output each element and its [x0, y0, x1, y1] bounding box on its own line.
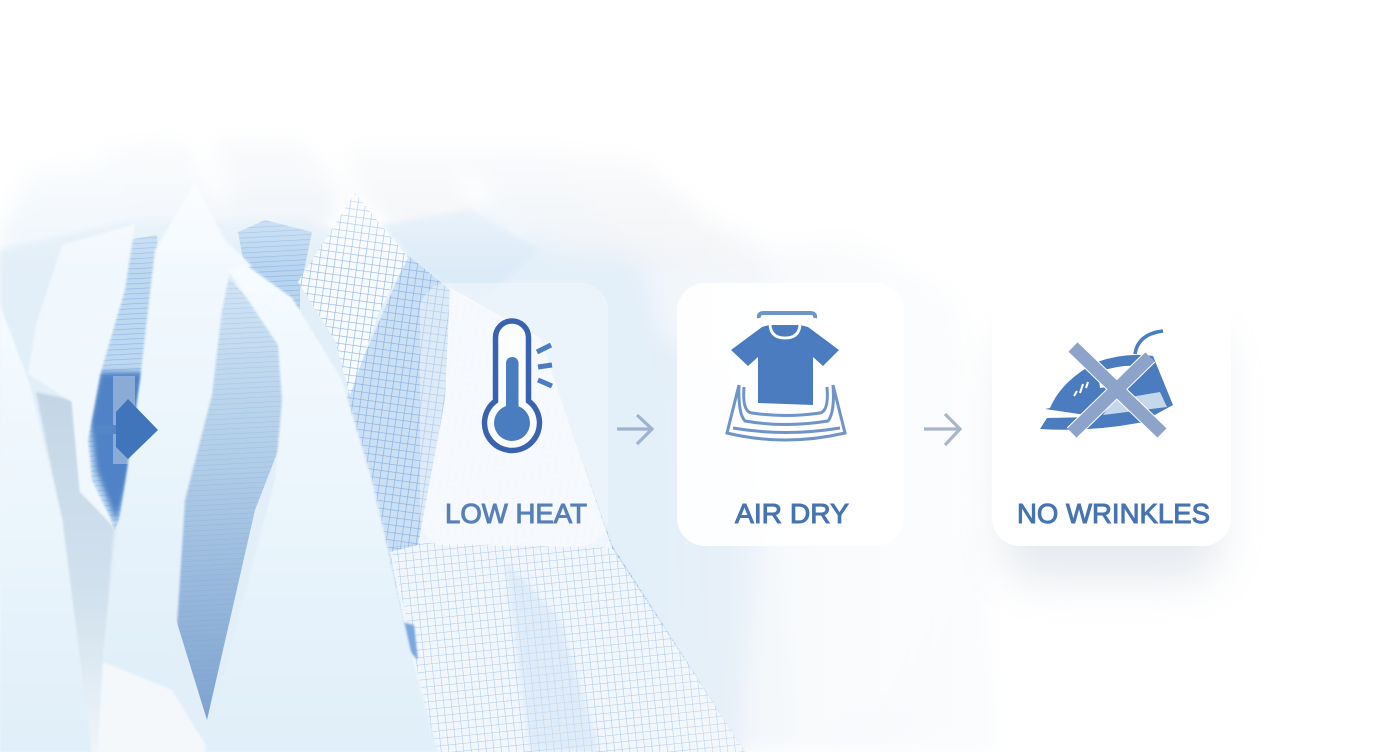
label: air dry: AIR DRY	[735, 498, 849, 529]
card shadow	[1002, 330, 1220, 580]
large front white shirt	[205, 264, 438, 752]
card: no wrinkles background	[992, 283, 1231, 546]
pale back collar	[380, 210, 540, 300]
decorative arrow marker on the shirt	[97, 399, 158, 459]
middle white shirt	[103, 183, 252, 690]
arrow: air dry to no wrinkles	[924, 414, 960, 445]
shadow under left flap	[36, 392, 114, 752]
arrow: heat to air dry	[617, 415, 652, 444]
blue gap striped shirt	[170, 265, 295, 720]
icon: thermometer	[484, 321, 552, 450]
panel: air dry	[677, 283, 904, 546]
fade overlays	[0, 100, 1392, 270]
panel: low heat	[420, 283, 608, 546]
card: low heat background	[420, 283, 608, 546]
card: air dry background	[677, 283, 904, 546]
label: low heat: LOW HEAT	[445, 498, 587, 529]
checked collar	[298, 193, 408, 395]
icon: crossed-out iron	[1040, 331, 1173, 433]
left flap collar	[28, 224, 135, 526]
lower hem of middle shirt	[97, 662, 210, 752]
panel: no wrinkles	[992, 283, 1231, 580]
base tone behind the front shirts	[0, 220, 745, 752]
striped inner shirt	[85, 235, 160, 530]
icon: shirt air drying	[727, 313, 845, 440]
checked shirt body	[345, 255, 745, 752]
top striped collar	[238, 220, 312, 310]
label: no wrinkles: NO WRINKLES	[1017, 498, 1210, 529]
back shirts fading to the right	[0, 140, 1000, 752]
leftmost shirt	[0, 305, 92, 752]
